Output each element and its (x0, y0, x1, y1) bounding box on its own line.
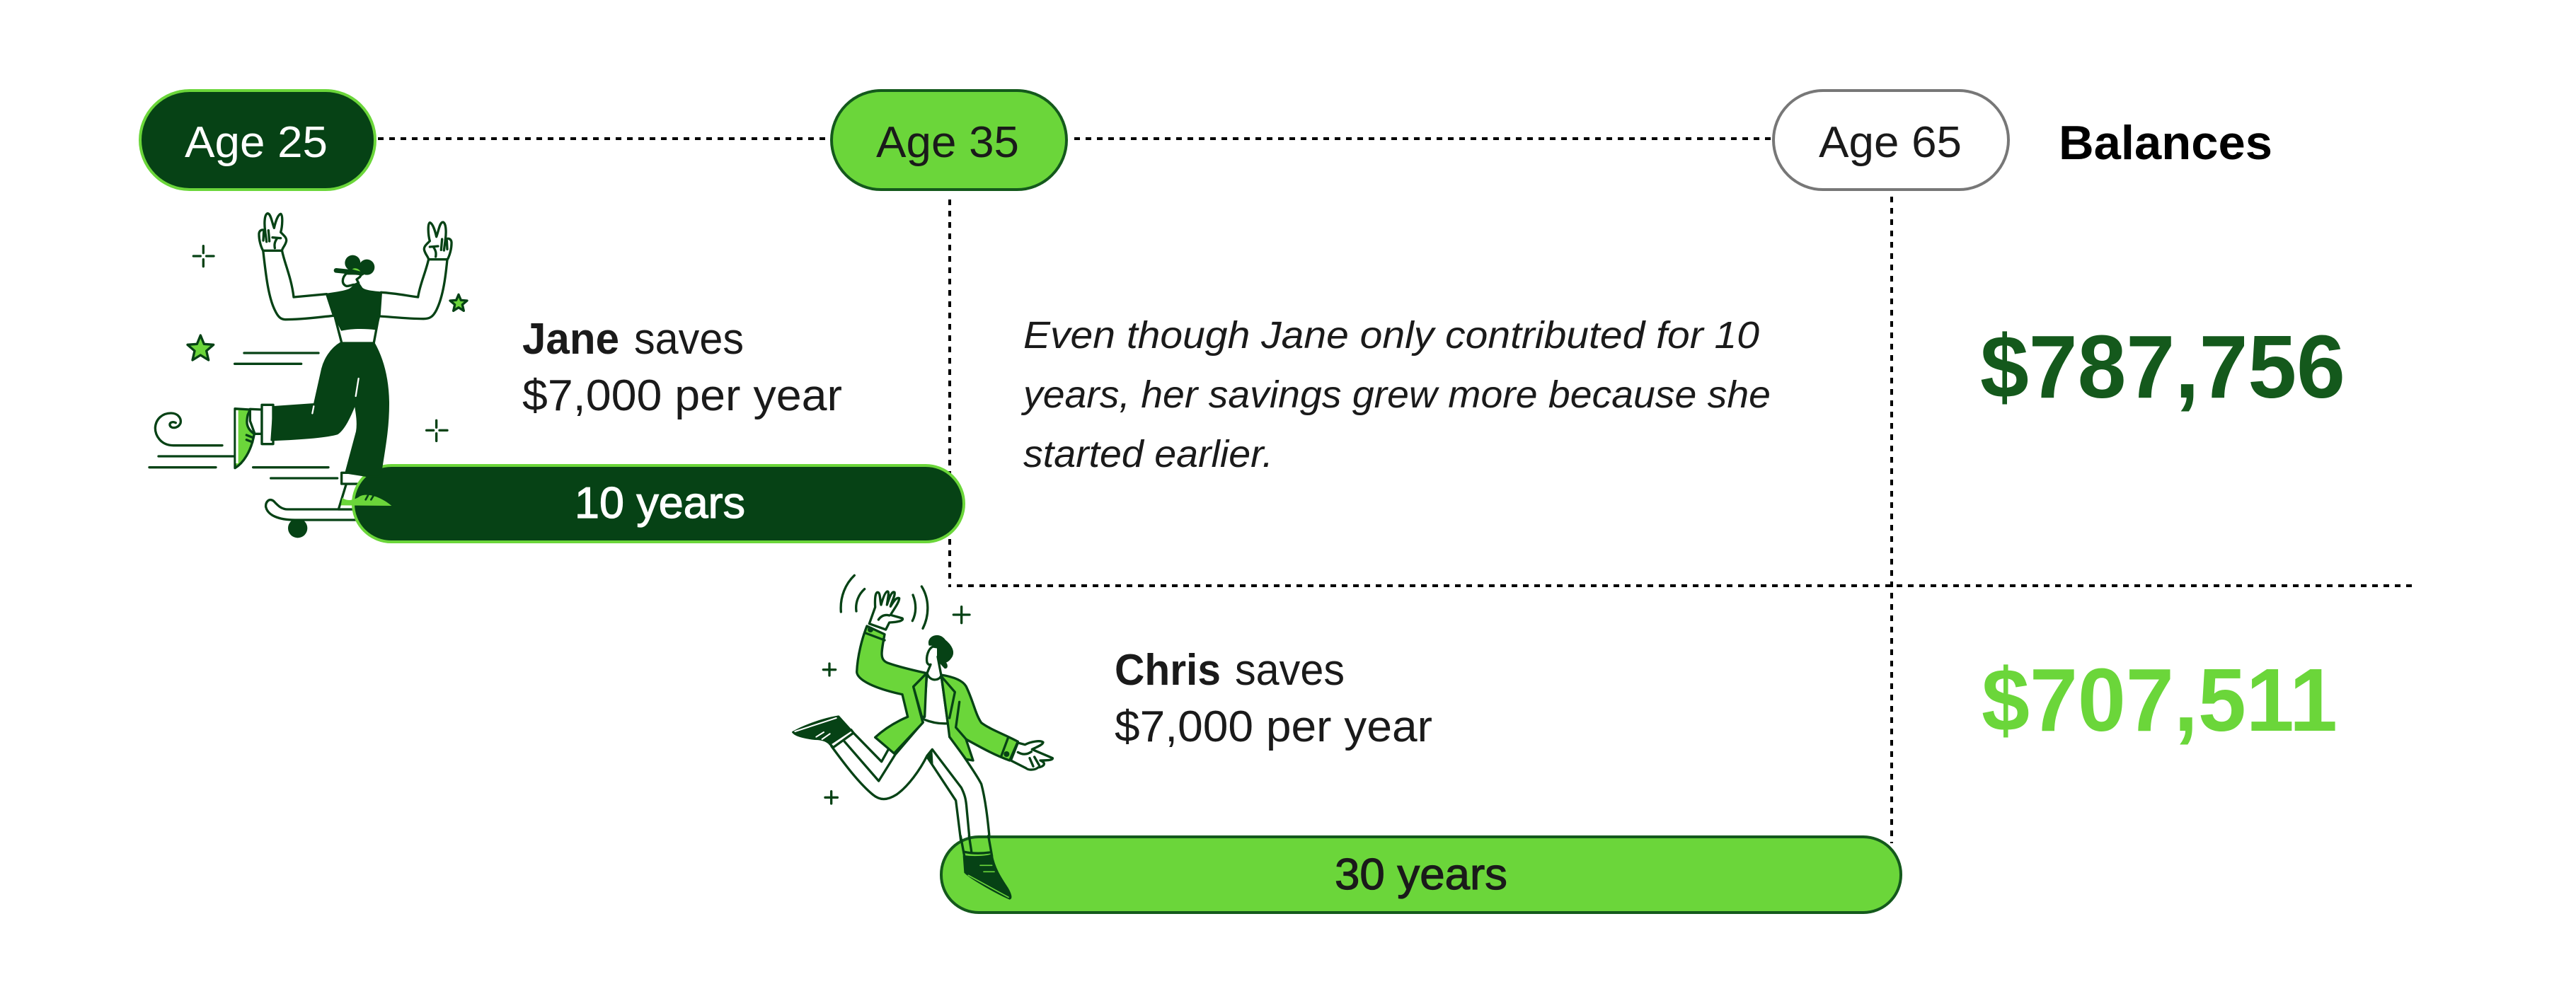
sparkles (193, 246, 447, 441)
raised hand (869, 591, 903, 630)
jacket: right sleeve and front (941, 675, 1018, 760)
back shoe (793, 716, 853, 748)
face and neck (927, 647, 941, 680)
grid lines: age 35 and age 65 verticals, row divider (948, 197, 2414, 843)
torso sides (335, 317, 379, 342)
left hand (259, 214, 287, 250)
jacket: raised sleeve and left front (857, 626, 926, 753)
trouser highlights (312, 378, 359, 413)
pill: Age 65 (1773, 91, 2008, 190)
rolled cuff: front leg (342, 473, 372, 484)
right arm (379, 257, 447, 319)
back foot (235, 409, 262, 468)
cuff buttons (868, 627, 1009, 757)
pill: Age 25: Age 25 (185, 118, 328, 167)
note: why Jane's savings grew more: years, her savings grew more because she (1020, 374, 1771, 416)
shoe on bar (341, 495, 391, 506)
front shoe (964, 855, 1011, 899)
balance: Chris: $707,511 (1982, 650, 2338, 750)
trouser outlines (832, 722, 991, 851)
trousers (271, 342, 389, 476)
cap (336, 267, 363, 273)
right hand (424, 222, 452, 260)
leg lines on bar (960, 836, 992, 856)
text: Chris saves: $7,000 per year (1115, 702, 1432, 751)
trousers (832, 722, 991, 851)
illustration: Jane trousers and shoe, front layer (271, 342, 391, 506)
pill: Age 25 (140, 91, 375, 190)
star: small (450, 294, 467, 311)
lowered hand (1011, 741, 1052, 770)
star: large (188, 335, 214, 360)
jacket details (866, 633, 1008, 756)
crotch shadow (927, 749, 933, 765)
skateboard deck (266, 500, 366, 520)
illustration: Chris leg and shoe, front layer (960, 836, 1011, 899)
hair (929, 636, 953, 668)
text: Chris saves: saves (1235, 646, 1345, 695)
left arm (263, 250, 334, 320)
bar: Chris 30 years: 30 years (1335, 850, 1507, 899)
note: why Jane's savings grew more (1020, 314, 1771, 475)
note: why Jane's savings grew more: started earlier. (1023, 433, 1273, 475)
bar: Chris 30 years (941, 837, 1901, 913)
plus signs (823, 607, 970, 804)
balance: Jane: $787,756 (1980, 317, 2345, 417)
speed lines and wind swirl (149, 353, 338, 478)
text: Jane saves: $7,000 per year (522, 371, 842, 420)
motion arcs (841, 575, 928, 628)
pill: Age 65: Age 65 (1819, 118, 1962, 167)
text: Chris saves: Chris (1115, 646, 1221, 695)
crop top (327, 283, 381, 330)
timeline connector: age 25 to age 65 (378, 137, 1772, 140)
text: Jane saves (522, 315, 842, 420)
ankle: front leg (338, 484, 363, 509)
text: Jane saves: Jane (522, 315, 619, 364)
shirt (924, 673, 948, 724)
waist band (342, 329, 376, 337)
hair buns (345, 255, 374, 275)
jacket: lapel left (914, 673, 926, 717)
pill: Age 35: Age 35 (876, 118, 1019, 167)
bar: Jane 10 years (353, 465, 964, 542)
note: why Jane's savings grew more: Even though Jane only contributed for 10 (1023, 314, 1759, 357)
bar: Jane 10 years: 10 years (575, 479, 745, 528)
illustration: Chris running, background layer (793, 575, 1052, 851)
skateboard wheel (288, 519, 307, 538)
pill: Age 35 (832, 91, 1066, 190)
text: Chris saves (1115, 646, 1432, 751)
face (343, 274, 362, 286)
heading: Balances: Balances (2059, 116, 2272, 170)
illustration: Jane on skateboard, background layer (149, 214, 467, 538)
text: Jane saves: saves (634, 315, 744, 364)
rolled cuff: back leg (262, 405, 273, 444)
